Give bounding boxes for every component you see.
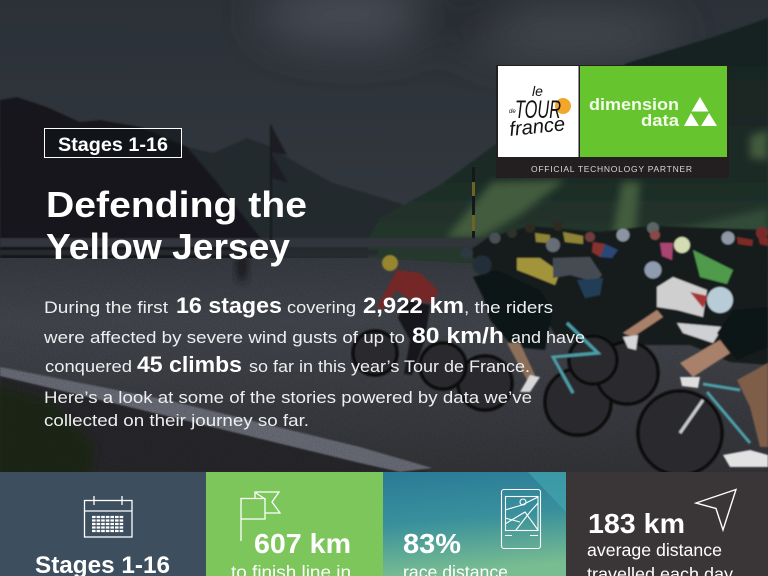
tag: Stages 1-16: Stages 1-16 <box>58 135 168 156</box>
panel: stages <box>0 472 206 576</box>
panel: distance to finish <box>206 472 383 576</box>
Dimension Data logo: dimension <box>589 95 679 114</box>
title: Yellow Jersey <box>46 226 290 267</box>
intro text block: During the first <box>44 298 168 317</box>
icon: map device <box>502 490 540 548</box>
road grain <box>0 258 768 472</box>
grass corner <box>0 385 95 480</box>
logo lockup <box>496 65 729 178</box>
icon: flag <box>241 492 280 541</box>
intro text block: 16 stages <box>176 293 282 318</box>
intro text block: 2,922 km <box>363 293 464 318</box>
back row jerseys <box>535 232 583 244</box>
blurred rider in distance <box>236 250 248 282</box>
guard rail <box>0 238 490 255</box>
near left mountain <box>0 97 262 262</box>
tag: Stages 1-16 <box>44 128 182 158</box>
yellow jersey rider <box>517 258 560 285</box>
Tour de France logo: le <box>532 83 543 99</box>
intro text block: Here’s a look at some of the stories powered by data we’ve <box>44 388 532 407</box>
rider in red <box>377 270 438 310</box>
Dimension Data logo: data <box>641 111 680 130</box>
intro text block <box>43 293 585 430</box>
logo lockup: OFFICIAL TECHNOLOGY PARTNER <box>531 164 692 174</box>
green hillside on the right <box>368 18 768 290</box>
cyclists peloton <box>353 221 768 475</box>
Dimension Data logo <box>580 66 727 157</box>
intro text block: covering <box>287 298 356 317</box>
road surface <box>0 258 768 472</box>
wheels <box>353 331 722 475</box>
intro text block: 80 km/h <box>412 323 504 348</box>
yellow marked pole <box>472 167 475 247</box>
panel: average distance <box>566 472 768 576</box>
intro text block: 45 climbs <box>137 352 242 377</box>
title <box>46 184 307 267</box>
storm clouds <box>260 0 680 55</box>
back row helmets <box>461 221 768 259</box>
road edge line <box>0 367 432 472</box>
distant mountain <box>140 127 402 262</box>
intro text block: collected on their journey so far. <box>44 411 309 430</box>
panel: race distance: 83% <box>403 528 461 559</box>
front right rider <box>717 307 768 360</box>
intro text block: and have <box>511 328 585 347</box>
icon: navigation arrow <box>696 490 736 530</box>
Tour de France logo: france <box>508 113 566 141</box>
verge below road edge <box>0 372 432 472</box>
centre rider in black <box>473 270 553 350</box>
intro text block: so far in this year’s Tour de France. <box>249 357 530 376</box>
shadow mass of the pack <box>468 226 768 365</box>
flag pole <box>270 125 288 240</box>
title: Defending the <box>46 184 307 225</box>
panel: race distance <box>383 472 566 576</box>
intro text block: were affected by severe wind gusts of up to <box>43 328 405 347</box>
intro text block: , the riders <box>464 298 553 317</box>
grey rider <box>553 257 602 282</box>
icon: calendar <box>84 496 132 537</box>
green jersey rider <box>693 250 733 284</box>
Tour de France logo: de <box>509 109 516 115</box>
teal bike frames <box>553 323 750 443</box>
panel: average distance: average distance <box>587 540 722 560</box>
panel: average distance: 183 km <box>588 508 685 539</box>
Tour de France logo: TOUR <box>515 96 561 124</box>
rider in white and red <box>657 277 707 317</box>
panel: distance to finish: 607 km <box>254 528 351 559</box>
Tour de France logo <box>498 66 578 157</box>
meadows on the hillside <box>446 130 768 242</box>
intro text block: conquered <box>45 357 132 376</box>
